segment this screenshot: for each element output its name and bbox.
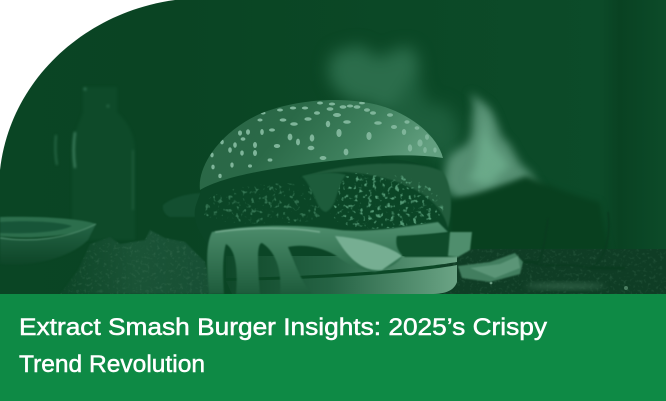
lettuce [60, 230, 212, 294]
tomato layer [312, 164, 452, 226]
pickle [396, 232, 472, 257]
dark grill mound behind burger [450, 176, 610, 252]
bottle [54, 86, 134, 211]
title text: Trend Revolution [19, 351, 205, 378]
patty crust texture left [204, 183, 321, 224]
bowl [0, 216, 96, 259]
patty crust texture right [330, 172, 444, 228]
melted cheese [207, 222, 448, 294]
table crumb [458, 253, 523, 282]
flame [443, 92, 542, 200]
panel: hero photo of smash burger with green duotone [0, 0, 666, 294]
cheese drape over patty [302, 173, 346, 212]
bottom bun lower [259, 265, 457, 294]
bottom bun upper [258, 256, 457, 277]
small dish behind burger [163, 194, 200, 216]
glasses on table [522, 212, 625, 268]
table surface [440, 249, 666, 294]
smoke plume [325, 44, 458, 163]
sesame seeds [210, 102, 437, 178]
title text: Extract Smash Burger Insights: 2025’s Crispy [19, 314, 548, 341]
dark filling base [195, 194, 203, 216]
title band [0, 294, 666, 401]
flame core [470, 123, 509, 186]
burger [195, 100, 472, 294]
top bun [200, 100, 443, 190]
